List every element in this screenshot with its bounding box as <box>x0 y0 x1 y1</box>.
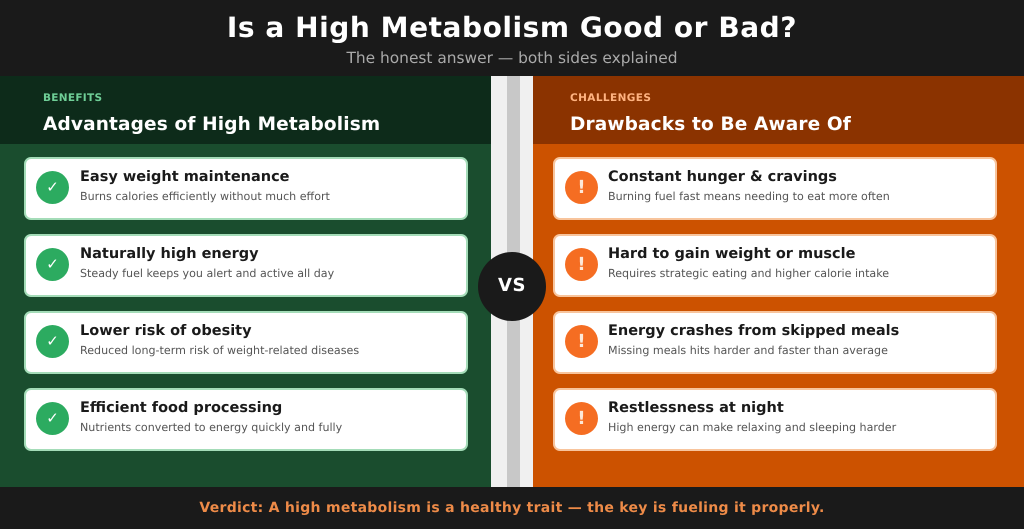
card: hard to gain weight <box>553 234 997 297</box>
card: constant hunger: Constant hunger & cravings <box>608 169 837 185</box>
card: energy crashes: Energy crashes from skipped meals <box>608 323 899 339</box>
card: naturally high energy: ✓ <box>46 255 59 273</box>
card: lower risk of obesity: Lower risk of obesity <box>80 323 252 339</box>
card: efficient food processing: Nutrients converted to energy quickly and fully <box>80 421 342 434</box>
card: efficient food processing: Efficient food processing <box>80 400 282 416</box>
card: easy weight maintenance: ✓ <box>46 178 59 196</box>
card: restlessness: ! <box>577 408 586 429</box>
center divider <box>491 76 533 487</box>
heading: drawbacks: Drawbacks to Be Aware Of <box>570 114 851 135</box>
heading: advantages: Advantages of High Metabolism <box>43 114 380 135</box>
VS badge: VS <box>498 275 526 296</box>
VS badge <box>478 252 546 321</box>
card: restlessness <box>553 388 997 451</box>
card: energy crashes: Missing meals hits harder and faster than average <box>608 344 888 357</box>
card: hard to gain weight: Hard to gain weight or muscle <box>608 246 855 262</box>
title: Is a High Metabolism Good or Bad? <box>227 11 797 44</box>
card: constant hunger <box>553 157 997 220</box>
card: naturally high energy: Naturally high energy <box>80 246 259 262</box>
card: easy weight maintenance: Burns calories efficiently without much effort <box>80 190 330 203</box>
panel: benefits <box>0 76 491 487</box>
card: efficient food processing: ✓ <box>46 409 59 427</box>
card: restlessness: High energy can make relaxing and sleeping harder <box>608 421 896 434</box>
card: lower risk of obesity: Reduced long-term risk of weight-related diseases <box>80 344 359 357</box>
card: easy weight maintenance <box>24 157 468 220</box>
card: hard to gain weight: Requires strategic eating and higher calorie intake <box>608 267 889 280</box>
card: energy crashes <box>553 311 997 374</box>
card: efficient food processing <box>24 388 468 451</box>
card: restlessness: Restlessness at night <box>608 400 784 416</box>
verdict: Verdict: A high metabolism is a healthy trait — the key is fueling it properly. <box>199 500 825 516</box>
subtitle: The honest answer — both sides explained <box>346 49 677 67</box>
eyebrow: challenges: CHALLENGES <box>570 92 651 104</box>
card: naturally high energy: Steady fuel keeps you alert and active all day <box>80 267 334 280</box>
card: lower risk of obesity: ✓ <box>46 332 59 350</box>
card: lower risk of obesity <box>24 311 468 374</box>
card: hard to gain weight: ! <box>577 254 586 275</box>
panel: challenges <box>533 76 1024 487</box>
panel header: challenges <box>533 76 1024 144</box>
card: constant hunger: ! <box>577 177 586 198</box>
card: naturally high energy <box>24 234 468 297</box>
eyebrow: benefits: BENEFITS <box>43 92 102 104</box>
card: constant hunger: Burning fuel fast means needing to eat more often <box>608 190 890 203</box>
card: easy weight maintenance: Easy weight maintenance <box>80 169 290 185</box>
panel header: benefits <box>0 76 491 144</box>
card: energy crashes: ! <box>577 331 586 352</box>
